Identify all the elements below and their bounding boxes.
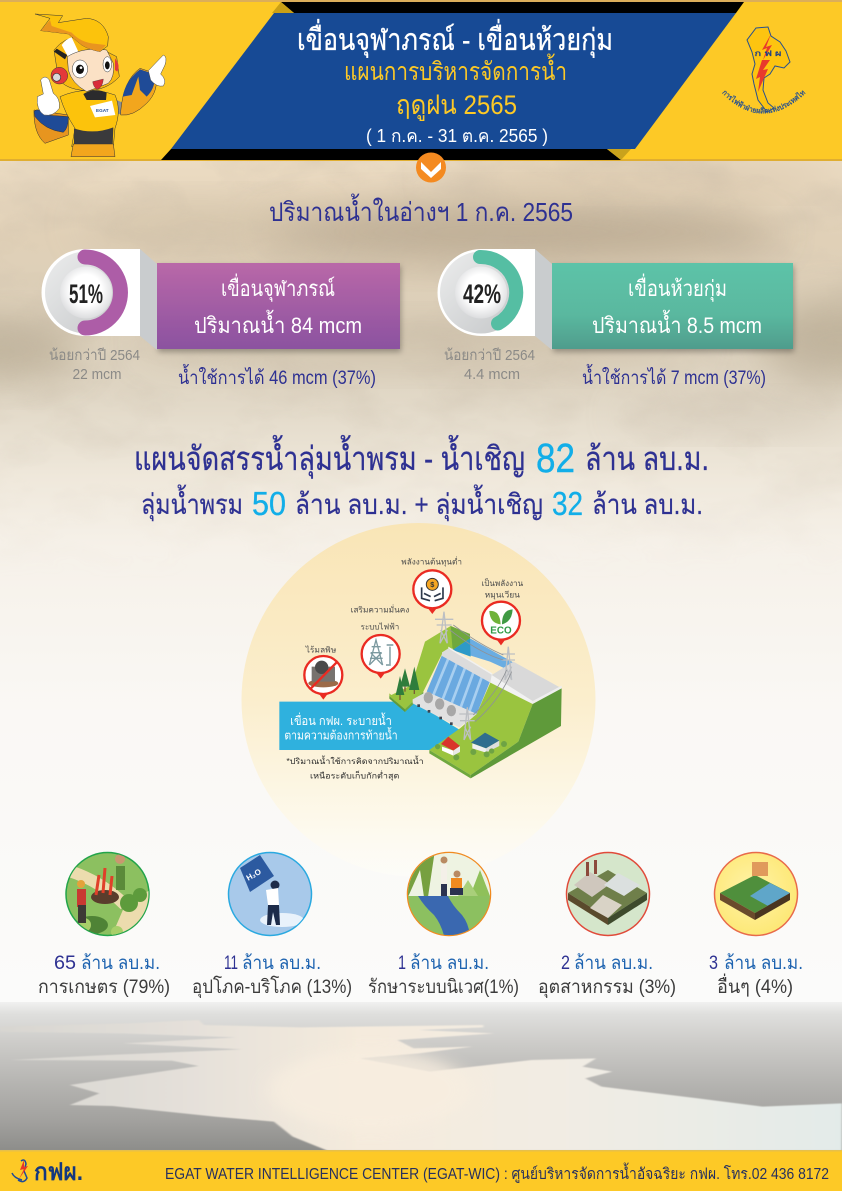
stat: others: 3: [709, 953, 718, 974]
heading text: แผนการบริหารจัดการน้ำ: [344, 53, 567, 86]
heading: allocation plan: แผนจัดสรรน้ำลุ่มน้ำพรม - น้ำเชิญ: [134, 435, 525, 479]
houses: [435, 733, 507, 760]
icon: consumption: H₂O: [245, 867, 263, 883]
stat: consumption: ล้าน ลบ.ม.: [242, 953, 321, 974]
gauge 51%: [45, 252, 127, 334]
stat: agriculture: ล้าน ลบ.ม.: [81, 953, 160, 974]
icon: ecosystem: [405, 850, 493, 940]
heading text: [297, 19, 613, 146]
stat: others: [709, 953, 803, 998]
pin: grid stability: เสริมความมั่นคง: [351, 604, 409, 615]
panel: Chulabhorn dam: [42, 249, 400, 389]
subheading: two basins: ล้าน ลบ.ม. + ลุ่มน้ำเชิญ: [295, 484, 543, 522]
stat: industry: 2: [561, 953, 570, 974]
mascot: [34, 14, 166, 157]
stat: agriculture: [38, 953, 170, 998]
section title: water volume: ปริมาณน้ำในอ่างฯ 1 ก.ค. 2565: [269, 193, 573, 227]
pin: grid stability: ระบบไฟฟ้า: [361, 622, 399, 631]
stat: industry: [538, 953, 676, 999]
stat: ecosystem: ล้าน ลบ.ม.: [410, 953, 489, 974]
dam illustration: [279, 556, 562, 781]
pin: hydro cost: $: [430, 580, 434, 589]
stat: ecosystem: รักษาระบบนิเวศ(1%): [368, 977, 519, 998]
logo: EGAT Thailand map: [722, 26, 806, 114]
pin: grid stability: [351, 604, 409, 679]
stat: consumption: 11: [224, 953, 238, 974]
panel: Chulabhorn dam: 22 mcm: [72, 366, 122, 383]
icon: consumption: [228, 852, 312, 936]
panel: Huai Kum dam: เขื่อนห้วยกุ่ม: [628, 273, 727, 302]
river label box: เขื่อน กฟผ. ระบายน้ำ: [290, 712, 392, 728]
pin: no pollution: ไร้มลพิษ: [305, 645, 336, 654]
footnote: [286, 755, 424, 781]
panel: Huai Kum dam: น้อยกว่าปี 2564: [444, 347, 535, 364]
footer logo: [12, 1159, 83, 1186]
panel: Chulabhorn dam: ปริมาณน้ำ 84 mcm: [194, 310, 362, 338]
river label box: [279, 702, 460, 750]
heading text: เขื่อนจุฬาภรณ์ - เขื่อนห้วยกุ่ม: [297, 19, 613, 59]
panel: Huai Kum dam: [438, 249, 793, 389]
mascot tag: EGAT: [96, 108, 109, 113]
footer logo: กฟผ.: [34, 1159, 83, 1186]
pins and footnote: [286, 556, 524, 781]
pylons: [435, 612, 515, 740]
stat: industry: ล้าน ลบ.ม.: [574, 953, 653, 974]
pin: hydro cost: [401, 556, 462, 614]
stat: agriculture: 65: [54, 953, 76, 974]
heading: allocation plan: 82: [536, 435, 575, 481]
subheading: two basins: ลุ่มน้ำพรม: [141, 484, 243, 522]
panel: Huai Kum dam: ปริมาณน้ำ 8.5 mcm: [592, 310, 762, 338]
heading: allocation plan: [134, 435, 709, 481]
subheading: two basins: [141, 484, 703, 522]
pin: renewable energy: หมุนเวียน: [485, 590, 521, 599]
icon: others: [714, 852, 798, 936]
footnote: *ปริมาณน้ำใช้การคิดจากปริมาณน้ำ: [286, 755, 424, 766]
icon: industry: [566, 852, 650, 936]
gauge 51%: 51%: [69, 279, 103, 309]
trees: [396, 667, 419, 695]
pin: renewable energy: เป็นพลังงาน: [481, 578, 524, 588]
panel: Chulabhorn dam: เขื่อนจุฬาภรณ์: [221, 273, 335, 302]
pin: no pollution: [304, 645, 342, 700]
panel: Huai Kum dam: 4.4 mcm: [464, 366, 520, 383]
subheading: two basins: 32: [552, 485, 583, 522]
panel: sun circle with dam illustration: [242, 523, 596, 877]
pin: renewable energy: [481, 578, 524, 645]
logo: EGAT Thailand map: ก ฟ ผ: [754, 49, 782, 58]
stat: ecosystem: [368, 953, 519, 998]
stat: consumption: [192, 953, 352, 999]
subheading: two basins: 50: [252, 485, 286, 522]
pin: renewable energy: ECO: [490, 625, 512, 636]
heading: allocation plan: ล้าน ลบ.ม.: [585, 440, 709, 477]
header banner: [0, 0, 842, 161]
subheading: two basins: ล้าน ลบ.ม.: [592, 489, 703, 520]
footnote: เหนือระดับเก็บกักต่ำสุด: [310, 770, 399, 781]
gauge 42%: [440, 252, 522, 334]
stat: consumption: อุปโภค-บริโภค (13%): [192, 975, 352, 999]
heading text: ฤดูฝน 2565: [396, 90, 517, 121]
dam structure: [389, 626, 562, 778]
stat: industry: อุตสาหกรรม (3%): [538, 977, 676, 999]
stat: others: ล้าน ลบ.ม.: [724, 953, 803, 974]
icon: agriculture: [66, 852, 150, 940]
panel: Huai Kum dam: น้ำใช้การได้ 7 mcm (37%): [582, 364, 766, 389]
river label box: ตามความต้องการท้ายน้ำ: [284, 726, 398, 742]
pin: hydro cost: พลังงานต้นทุนต่ำ: [401, 556, 462, 567]
heading text: ( 1 ก.ค. - 31 ต.ค. 2565 ): [366, 126, 548, 146]
lake scene: [0, 1002, 842, 1151]
stat: others: อื่นๆ (4%): [717, 973, 793, 998]
stat: agriculture: การเกษตร (79%): [38, 977, 170, 998]
icon: chevron down: [416, 152, 446, 182]
gauge 42%: 42%: [463, 279, 501, 309]
stat: ecosystem: 1: [398, 953, 406, 974]
panel: Chulabhorn dam: น้อยกว่าปี 2564: [49, 347, 140, 364]
panel: Chulabhorn dam: น้ำใช้การได้ 46 mcm (37%): [178, 364, 376, 389]
footer bar: [0, 1150, 842, 1191]
